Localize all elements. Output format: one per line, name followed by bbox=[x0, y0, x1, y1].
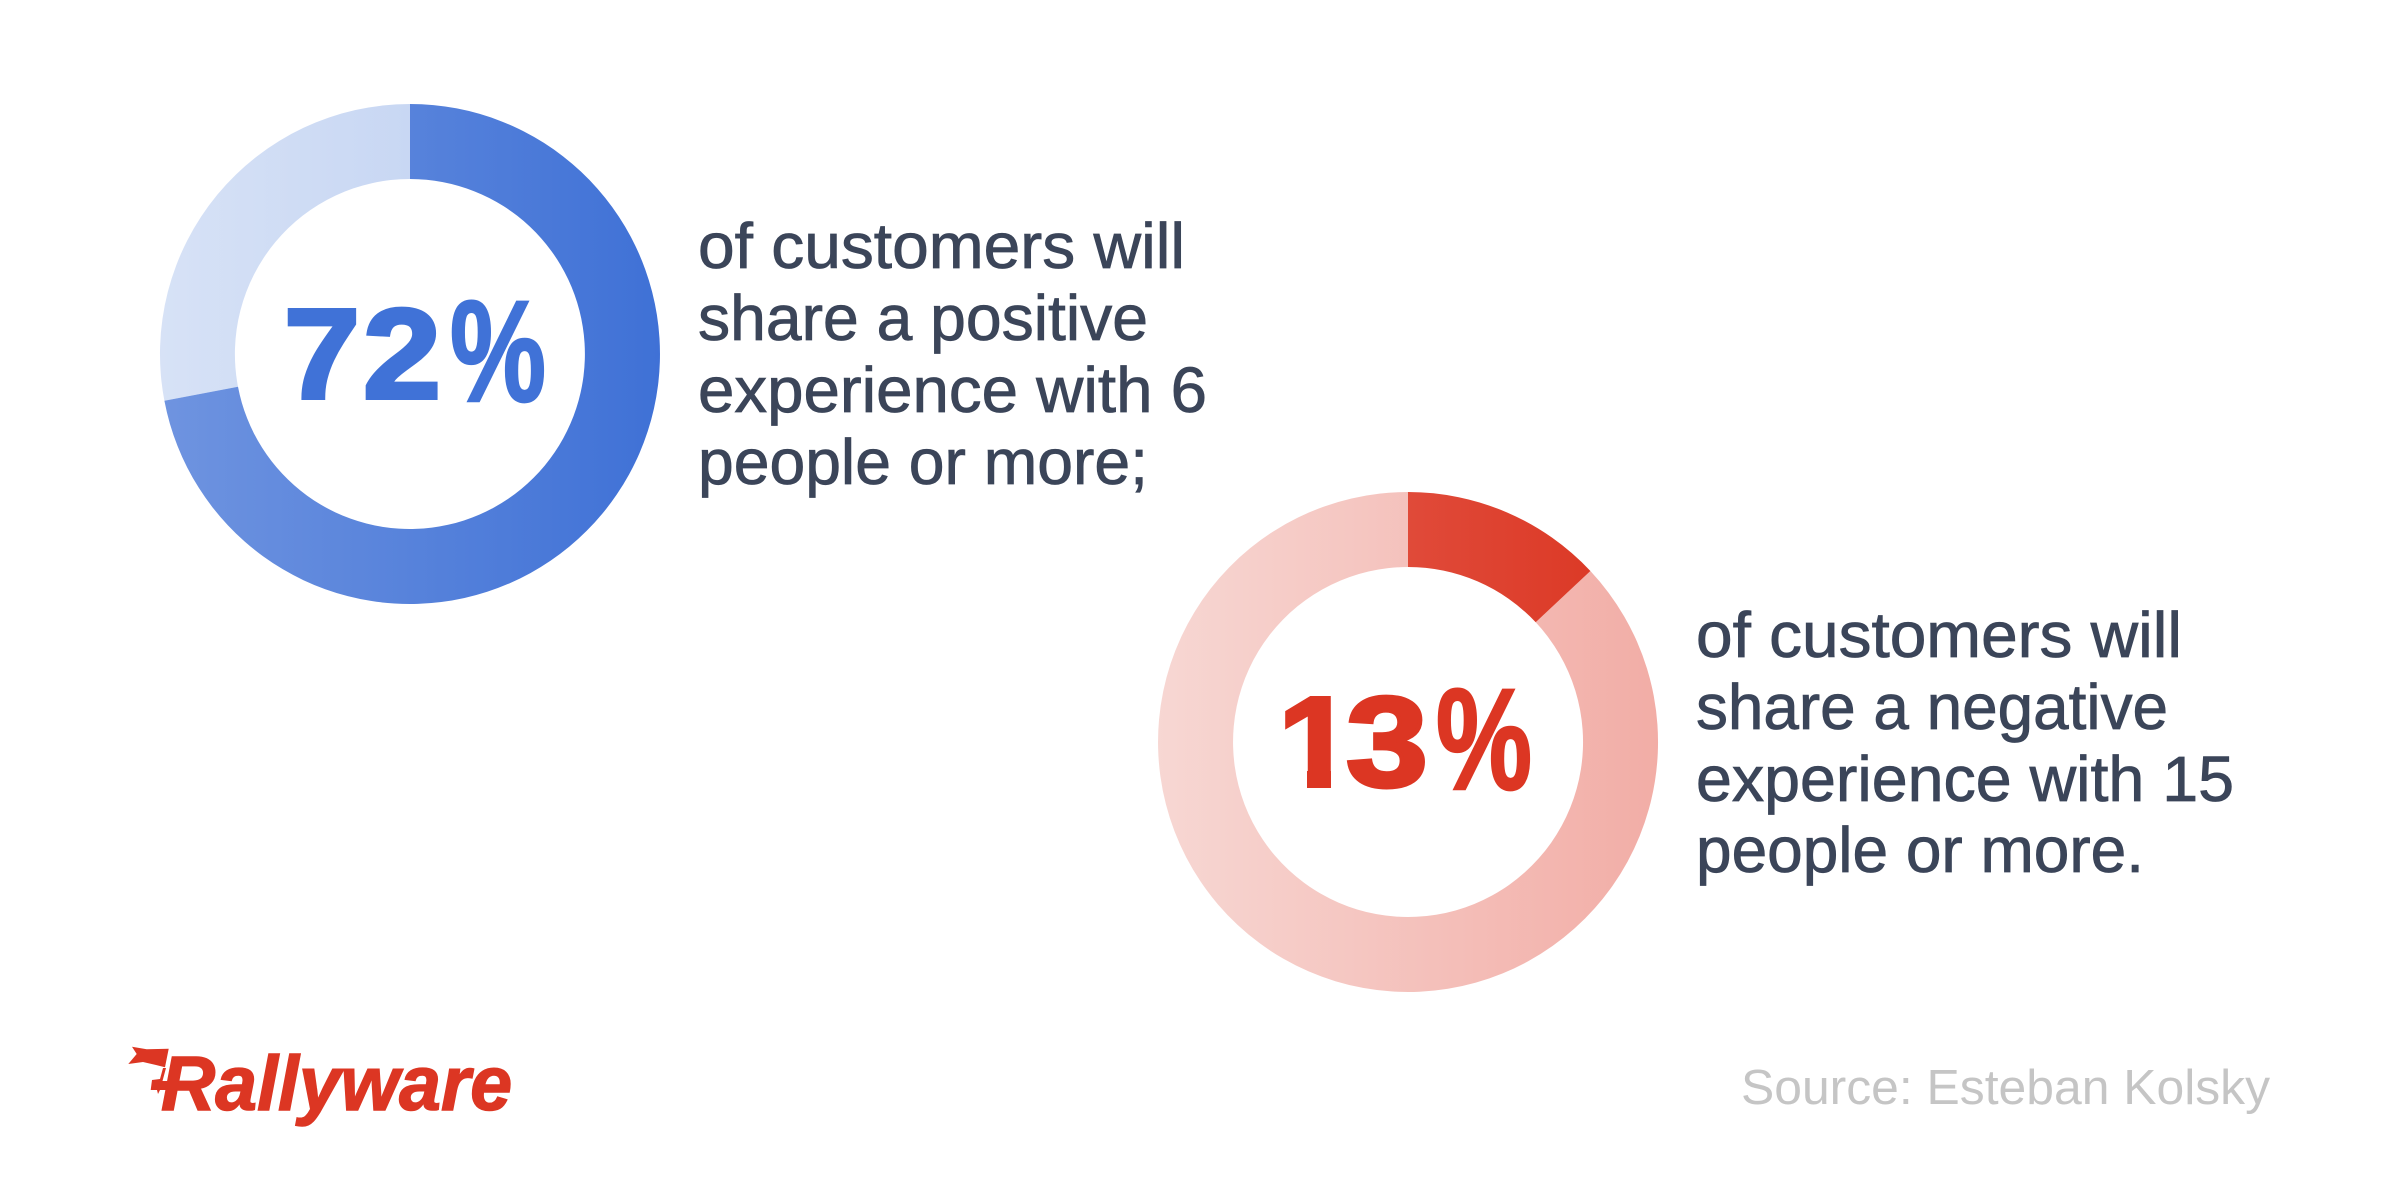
description: positive: of customers will bbox=[698, 210, 1185, 282]
donut segment: 13% bbox=[1408, 492, 1590, 622]
description: negative: of customers will bbox=[1696, 599, 2182, 671]
description: negative: experience with 15 bbox=[1696, 743, 2234, 815]
stat: 72% bbox=[284, 271, 546, 432]
logo: Rallyware bbox=[128, 1041, 512, 1127]
panel: positive experience bbox=[160, 104, 1207, 604]
donut chart: 72% bbox=[160, 104, 660, 604]
donut remainder: 28% bbox=[160, 104, 410, 401]
donut chart: 13% bbox=[1158, 492, 1658, 992]
description: negative: share a negative bbox=[1696, 671, 2168, 743]
source note: Source: Esteban Kolsky bbox=[1741, 1061, 2271, 1115]
stat: 13%: 3 bbox=[1346, 671, 1428, 814]
icon: flag bbox=[128, 1047, 169, 1067]
description: positive: experience with 6 bbox=[698, 354, 1207, 426]
wordmark: Rallyware bbox=[161, 1041, 512, 1127]
description: positive: people or more; bbox=[698, 426, 1148, 498]
donut remainder: 87% bbox=[1158, 492, 1658, 992]
description: negative: people or more. bbox=[1696, 814, 2144, 886]
stat: 13% bbox=[1285, 688, 1530, 792]
stat: 13%: % bbox=[1436, 659, 1532, 820]
icon: flag pole and crossbar bbox=[151, 1068, 182, 1094]
panel: negative experience bbox=[1158, 492, 2234, 992]
stat: 13%: 1 bbox=[1278, 671, 1354, 814]
donut segment: 72% bbox=[164, 104, 660, 604]
description: positive bbox=[698, 210, 1207, 498]
stat: 72%: 2 bbox=[363, 283, 441, 426]
stat: 72%: 7 bbox=[284, 283, 360, 426]
stat: 72%: % bbox=[450, 271, 546, 432]
description: positive: share a positive bbox=[698, 282, 1148, 354]
description: negative bbox=[1696, 599, 2234, 886]
